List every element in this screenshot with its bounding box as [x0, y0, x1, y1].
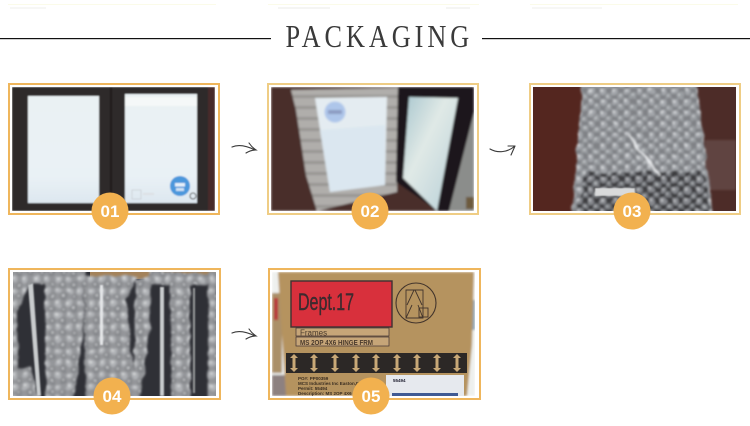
- arrow: step 2 to 3: [490, 146, 515, 155]
- badge 03: 03: [623, 202, 641, 221]
- panel: step 04 frames in carton: [9, 268, 220, 414]
- arrow: step 1 to 2: [232, 143, 256, 153]
- photo: labelled shipping carton: Frames: [300, 328, 327, 338]
- photo: labelled shipping carton: 55494: [393, 378, 406, 383]
- photo: wrapped frames packed in a box: [10, 268, 218, 400]
- panel: step 03 bubble wrap: [530, 84, 740, 230]
- panel: step 02 foam sleeve: [268, 84, 478, 230]
- badge 05: [352, 378, 390, 414]
- badge 01: 01: [101, 202, 119, 221]
- panel: step 05 shipping carton: [269, 269, 480, 414]
- photo: frame in foam sleeve beside open frame: [271, 87, 474, 211]
- photo: labelled shipping carton: MCS Industries Inc Easton,PA: [298, 381, 363, 386]
- photo: labelled shipping carton: Description: MS 2OP 4X6 HINGE: [298, 391, 367, 396]
- arrow: step 4 to 5: [232, 329, 256, 339]
- badge 02: [352, 192, 388, 230]
- heading: PACKAGING with side rules: PACKAGING: [286, 20, 469, 55]
- photo: bubble-wrapped frame on wood: [533, 84, 736, 215]
- panel: step 01 open hinged frame: [9, 84, 219, 230]
- badge 03: [614, 192, 650, 230]
- faint remnants of the section above: [8, 4, 738, 9]
- badge 01: [92, 192, 128, 230]
- badge 02: 02: [361, 202, 379, 221]
- photo: labelled shipping carton: PO#: PP00359: [298, 376, 329, 381]
- photo: labelled shipping carton: MS 2OP 4X6 HINGE FRM: [300, 340, 373, 347]
- photo: double frame with white inserts: [12, 87, 215, 211]
- photo: labelled shipping carton: [272, 272, 475, 396]
- photo: labelled shipping carton: Permit: 55494: [298, 386, 328, 391]
- badge 05: 05: [362, 387, 380, 406]
- badge 04: 04: [103, 387, 122, 406]
- badge 04: [94, 378, 130, 414]
- carton label text: Dept.17: [298, 289, 354, 316]
